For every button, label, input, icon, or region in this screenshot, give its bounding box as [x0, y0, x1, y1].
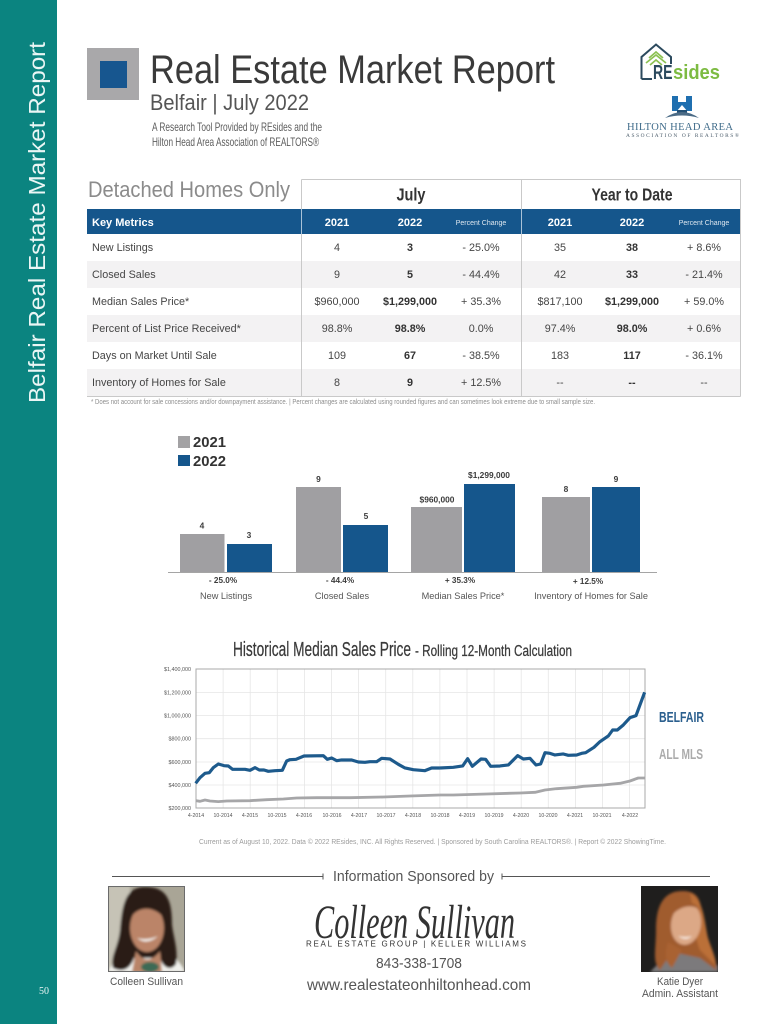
bars: inventory: + 12.5% — [573, 577, 604, 586]
y axis labels — [164, 667, 191, 812]
caption: Katie Dyer: Katie Dyer — [657, 976, 703, 988]
photo: Katie Dyer — [641, 886, 718, 972]
line chart — [164, 667, 645, 819]
bars: inventory: 8 — [564, 484, 569, 494]
row: percent of list price: Percent of List Price Received* — [92, 323, 242, 335]
row: inventory: -- — [700, 377, 708, 389]
x axis labels: 10-2019 — [484, 813, 504, 819]
row: median sales price: $817,100 — [537, 296, 583, 308]
row: median sales price: + 35.3% — [461, 296, 501, 308]
x axis labels: 4-2022 — [622, 813, 638, 819]
row: percent of list price: 0.0% — [469, 323, 494, 335]
y axis labels: $600,000 — [169, 760, 191, 766]
bars: inventory: 9 — [614, 474, 619, 484]
row: new listings: 3 — [407, 242, 413, 254]
bars: median sales price: + 35.3% — [445, 576, 476, 585]
row: new listings: - 25.0% — [462, 242, 500, 254]
row: days on market: 183 — [551, 350, 569, 362]
x axis labels: 10-2016 — [322, 813, 342, 819]
row: new listings: 38 — [626, 242, 638, 254]
legend: 2022 — [193, 453, 226, 470]
tagline: Hilton Head Area Association of REALTORS® — [152, 135, 319, 149]
line: Belfair — [196, 692, 645, 783]
x axis labels: 10-2015 — [267, 813, 287, 819]
sidebar — [0, 0, 57, 1024]
row: days on market: - 36.1% — [685, 350, 723, 362]
row: closed sales: 9 — [334, 269, 340, 281]
x axis labels: 10-2014 — [213, 813, 233, 819]
bars: closed sales — [296, 474, 388, 601]
x axis labels: 4-2016 — [296, 813, 312, 819]
heading: detached homes only: Detached Homes Only — [88, 177, 290, 202]
bars: closed sales: 9 — [316, 474, 321, 484]
table column header: 2022 — [398, 217, 422, 229]
row: median sales price: $960,000 — [314, 296, 360, 308]
logo: Hilton Head Area: HILTON HEAD AREA — [627, 122, 733, 133]
y axis labels: $1,400,000 — [164, 667, 191, 673]
tagline — [152, 120, 322, 149]
row: closed sales: - 21.4% — [685, 269, 723, 281]
table period header: year to date: Year to Date — [592, 184, 673, 204]
x axis labels: 4-2014 — [188, 813, 204, 819]
row: percent of list price: 98.8% — [395, 323, 426, 335]
legend: 2021 — [193, 434, 226, 451]
bars: new listings: 4 — [200, 520, 205, 530]
table: key metrics — [87, 180, 740, 396]
row: closed sales: - 44.4% — [462, 269, 500, 281]
x axis labels: 4-2015 — [242, 813, 258, 819]
bars: new listings: New Listings — [200, 591, 252, 601]
row: days on market: 67 — [404, 350, 416, 362]
row: days on market: 109 — [328, 350, 346, 362]
caption: Colleen Sullivan: Colleen Sullivan — [110, 976, 183, 988]
bars: closed sales: - 44.4% — [326, 576, 355, 585]
x axis labels: 4-2019 — [459, 813, 475, 819]
y axis labels: $1,000,000 — [164, 714, 191, 720]
row: inventory: 9 — [407, 377, 413, 389]
bars: inventory: Inventory of Homes for Sale — [534, 591, 648, 601]
table column header: Percent Change — [679, 220, 729, 227]
row: new listings: 4 — [334, 242, 340, 254]
y axis labels: $400,000 — [169, 783, 191, 789]
row: median sales price: + 59.0% — [684, 296, 724, 308]
sponsor tagline: REAL ESTATE GROUP | KELLER WILLIAMS — [306, 940, 526, 948]
sponsor heading: Information Sponsored by — [333, 868, 494, 885]
table column header: Key Metrics — [92, 217, 154, 229]
x axis labels: 10-2017 — [376, 813, 396, 819]
row: percent of list price: 97.4% — [545, 323, 576, 335]
table column header: 2021 — [325, 217, 349, 229]
bars: new listings: 3 — [247, 530, 252, 540]
row: percent of list price: 98.0% — [617, 323, 648, 335]
bars: median sales price: Median Sales Price* — [422, 591, 505, 601]
row: inventory: -- — [628, 377, 636, 389]
bars: median sales price: $960,000 — [420, 494, 455, 504]
photo: Colleen Sullivan — [108, 886, 185, 972]
sidebar title: Belfair Real Estate Market Report — [24, 41, 50, 403]
logo: Hilton Head Area — [626, 96, 739, 139]
logo: REsides — [642, 44, 720, 84]
row: days on market — [92, 350, 723, 362]
row: inventory: + 12.5% — [461, 377, 501, 389]
bar chart — [168, 434, 657, 601]
table column header: 2022 — [620, 217, 644, 229]
y axis labels: $1,200,000 — [164, 690, 191, 696]
chart source note: Current as of August 10, 2022. Data © 2022 REsides, INC. All Rights Reserved. | Sponsored by South Carolina REALTORS®. | Report © 2022 ShowingTime. — [199, 837, 666, 846]
heading: historical median sales price: Historical Median Sales Price — [233, 639, 411, 661]
table column header: 2021 — [548, 217, 572, 229]
x axis labels: 10-2020 — [538, 813, 558, 819]
x axis labels: 4-2021 — [567, 813, 583, 819]
row: percent of list price — [92, 323, 721, 335]
row: inventory: 8 — [334, 377, 340, 389]
bars: new listings: - 25.0% — [209, 576, 238, 585]
legend — [178, 434, 226, 470]
bars: new listings — [180, 520, 272, 601]
row: days on market: - 38.5% — [462, 350, 500, 362]
bars: inventory — [534, 474, 648, 601]
bars: closed sales: Closed Sales — [315, 591, 369, 601]
logo: REsides: sides — [673, 62, 720, 84]
sponsor website: www.realestateonhiltonhead.com — [306, 977, 531, 994]
row: new listings: New Listings — [92, 242, 154, 254]
signature: Colleen Sullivan — [314, 896, 515, 949]
x axis labels: 4-2018 — [405, 813, 421, 819]
row: days on market: 117 — [623, 350, 641, 362]
logo: Hilton Head Area: ASSOCIATION OF REALTORS® — [626, 132, 739, 139]
footnote: * Does not account for sale concessions and/or downpayment assistance. | Percent changes are calculated using rounded figures and can sometimes look extreme due to small sample size. — [91, 397, 595, 406]
y axis labels: $200,000 — [169, 806, 191, 812]
row: median sales price: Median Sales Price* — [92, 296, 190, 308]
row: median sales price: $1,299,000 — [605, 296, 659, 308]
bars: median sales price — [411, 470, 515, 601]
heading: historical median sales price: - Rolling 12-Month Calculation — [415, 643, 572, 660]
row: median sales price — [92, 296, 724, 308]
bars: median sales price: $1,299,000 — [468, 470, 510, 480]
page number: 50 — [39, 986, 49, 997]
row: new listings: 35 — [554, 242, 566, 254]
row: closed sales: Closed Sales — [92, 269, 156, 281]
caption: Katie Dyer — [642, 976, 718, 1000]
x axis labels: 10-2018 — [430, 813, 450, 819]
line: all MLS — [196, 778, 645, 802]
row: closed sales — [92, 269, 723, 281]
table column header — [87, 209, 740, 234]
legend label: all MLS: ALL MLS — [659, 746, 703, 763]
row: percent of list price: + 0.6% — [687, 323, 721, 335]
x axis labels: 4-2017 — [351, 813, 367, 819]
x axis labels: 4-2020 — [513, 813, 529, 819]
caption: Katie Dyer: Admin. Assistant — [642, 988, 718, 1000]
row: new listings — [92, 242, 721, 254]
x axis labels: 10-2021 — [592, 813, 612, 819]
row: closed sales: 33 — [626, 269, 638, 281]
legend label: Belfair: BELFAIR — [659, 709, 704, 726]
bars: closed sales: 5 — [364, 511, 369, 521]
row: percent of list price: 98.8% — [322, 323, 353, 335]
sponsor heading — [112, 868, 710, 885]
logo: REsides: RE — [653, 62, 672, 84]
row: new listings: + 8.6% — [687, 242, 721, 254]
row: inventory — [92, 377, 708, 389]
subtitle: Belfair | July 2022 — [150, 90, 309, 115]
table period header: July: July — [396, 184, 426, 204]
row: inventory: Inventory of Homes for Sale — [92, 377, 226, 389]
title: Real Estate Market Report — [150, 48, 555, 92]
sponsor logo — [306, 896, 526, 949]
row: median sales price: $1,299,000 — [383, 296, 437, 308]
x axis labels — [188, 813, 638, 819]
sponsor phone: 843-338-1708 — [376, 956, 462, 972]
row: inventory: -- — [556, 377, 564, 389]
row: closed sales: 42 — [554, 269, 566, 281]
row: closed sales: 5 — [407, 269, 413, 281]
icon: header square — [87, 48, 139, 100]
table column header: Percent Change — [456, 220, 506, 227]
y axis labels: $800,000 — [169, 737, 191, 743]
row: days on market: Days on Market Until Sale — [92, 350, 217, 362]
tagline: A Research Tool Provided by REsides and the — [152, 120, 322, 134]
